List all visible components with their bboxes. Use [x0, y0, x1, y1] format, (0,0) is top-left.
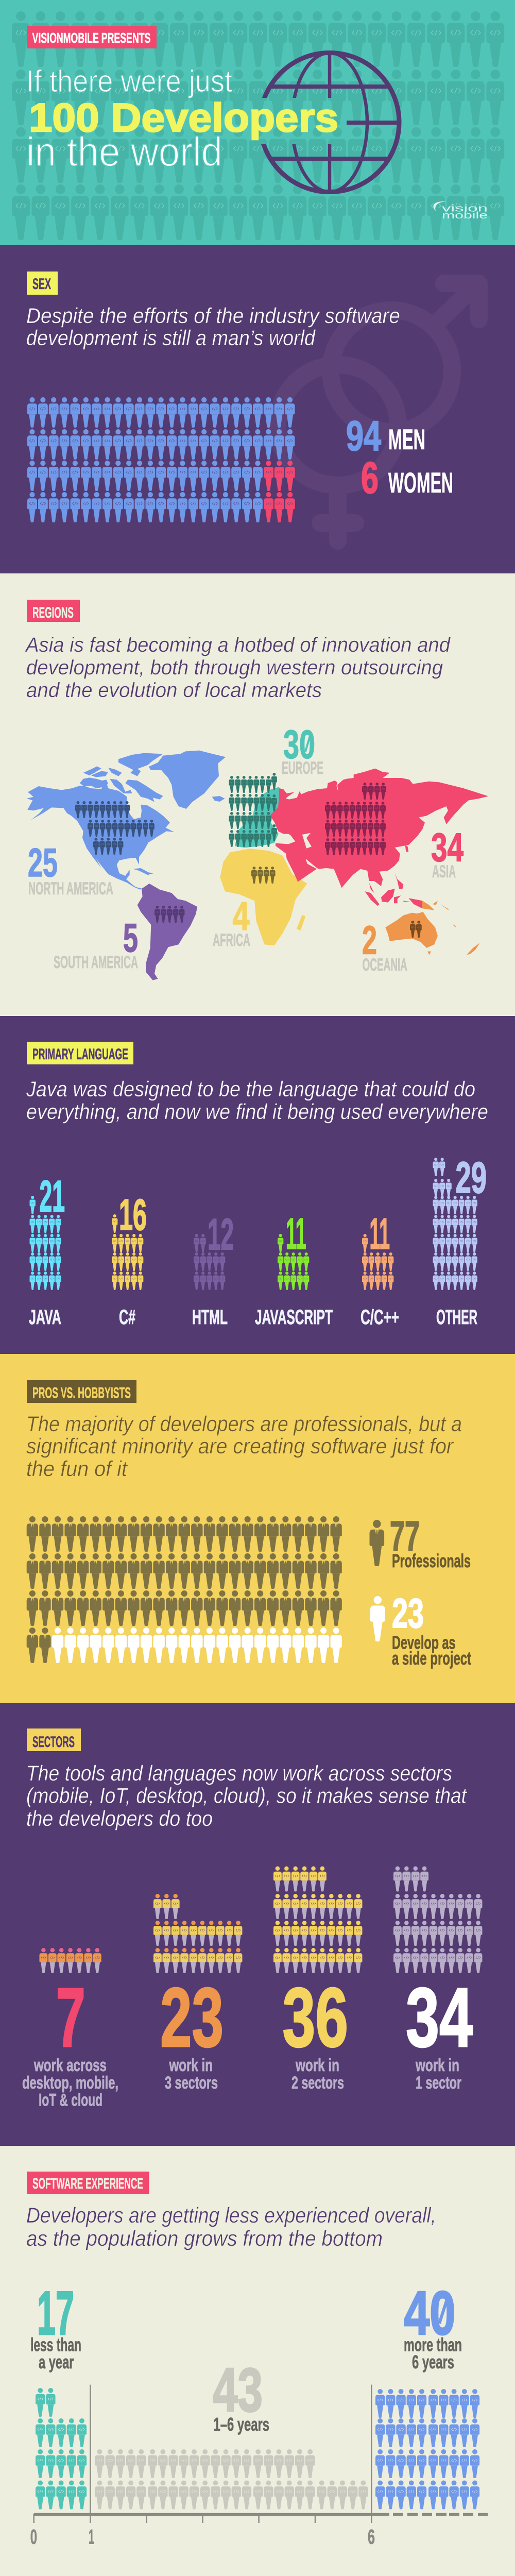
stat: europe 30: 30: [283, 721, 315, 767]
panel: sex: [0, 245, 515, 573]
icon: gender symbols watermark: [278, 283, 479, 541]
stat: 6 women: 6: [361, 453, 379, 503]
stat: north america 25: NORTH AMERICA: [28, 879, 113, 899]
column: 7 work across all sectors: IoT & cloud: [39, 2091, 102, 2110]
stat: 6 women: WOMEN: [388, 466, 453, 499]
column: 34 work in 1 sector: [393, 1866, 482, 2093]
tag: regions: [27, 600, 80, 622]
headline: [26, 1761, 468, 1831]
logo: vision mobile: vision: [442, 203, 488, 213]
people: north america: [75, 801, 154, 855]
map: asia: [270, 769, 488, 908]
stat: africa 4: AFRICA: [213, 930, 250, 950]
headline: [26, 1077, 488, 1124]
bar: javascript: JAVASCRIPT: [255, 1306, 333, 1329]
stat: 43 one to six years: 43: [213, 2355, 263, 2425]
stat: 6 women: [361, 453, 453, 503]
stat: 23 side project: Develop as: [392, 1632, 455, 1653]
stat: europe 30: EUROPE: [282, 758, 323, 778]
people: more than six years: [375, 2389, 479, 2509]
tag: sectors: [27, 1728, 81, 1751]
headline: development, both through western outsourcing: [26, 656, 443, 679]
tag: sex: [27, 272, 58, 295]
bar: other: OTHER: [436, 1306, 477, 1329]
bar: c and c++: 11: [370, 1210, 390, 1259]
people: one to six years: [95, 2449, 368, 2509]
bar: other: [433, 1154, 487, 1329]
bar: c and c++: C/C++: [360, 1306, 399, 1329]
column: 7 work across all sectors: [22, 1948, 118, 2110]
stat: 17 less than a year: less than: [30, 2334, 81, 2355]
column: 36 work in 2 sectors: 2 sectors: [291, 2073, 344, 2093]
headline: the developers do too: [26, 1806, 213, 1831]
bar: java: 21: [39, 1172, 65, 1221]
chart: experience axis: [30, 2385, 488, 2548]
headline: the fun of it: [26, 1456, 128, 1481]
stat: oceania 2: 2: [362, 917, 377, 962]
panel: sectors: [0, 1703, 515, 2146]
title: [26, 64, 338, 175]
bar: c sharp: C#: [119, 1306, 135, 1329]
column: 23 work in 3 sectors: [153, 1894, 242, 2093]
tag: sex: SEX: [32, 276, 51, 293]
title: 100 Developers: [29, 95, 338, 140]
stat: 17 less than a year: [30, 2279, 81, 2372]
tag: primary language: PRIMARY LANGUAGE: [32, 1046, 128, 1063]
map: south america: [138, 884, 197, 980]
people: africa: [251, 867, 276, 884]
headline: Despite the efforts of the industry software: [26, 303, 400, 328]
stat: south america 5: SOUTH AMERICA: [54, 953, 138, 972]
bar: c sharp: [112, 1191, 147, 1329]
title: If there were just: [26, 64, 232, 98]
chart: experience axis: 1: [89, 2526, 94, 2548]
tag: software experience: SOFTWARE EXPERIENCE: [32, 2175, 143, 2192]
chart: experience axis: 6: [368, 2526, 375, 2548]
logo: vision mobile: mobile: [442, 210, 488, 221]
column: 36 work in 2 sectors: 36: [282, 1970, 348, 2064]
column: 23 work in 3 sectors: 3 sectors: [165, 2073, 218, 2093]
icon: globe: [260, 52, 399, 193]
chart: 100 people by sex: [27, 397, 295, 522]
headline: [26, 1412, 462, 1481]
tag: visionmobile presents: [27, 26, 157, 48]
stat: 94 men: [346, 413, 425, 460]
headline: Java was designed to be the language that could do: [26, 1077, 475, 1101]
column: 36 work in 2 sectors: work in: [295, 2056, 339, 2075]
chart: experience axis: 0: [30, 2526, 37, 2548]
stat: south america 5: [54, 915, 138, 972]
column: 23 work in 3 sectors: work in: [169, 2056, 213, 2075]
people: south america: [154, 906, 184, 923]
title: in the world: [26, 129, 222, 175]
chart: 100 people professionals and hobbyists: [27, 1516, 342, 1663]
headline: development is still a man’s world: [26, 326, 316, 350]
people: europe: [229, 773, 277, 847]
column: 34 work in 1 sector: work in: [415, 2056, 459, 2075]
stat: 43 one to six years: 1–6 years: [213, 2414, 269, 2435]
tag: pros vs hobbyists: PROS VS. HOBBYISTS: [32, 1385, 131, 1401]
headline: Asia is fast becoming a hotbed of innovation and: [25, 634, 451, 656]
map: europe: [235, 787, 281, 848]
headline: and the evolution of local markets: [26, 679, 322, 702]
panel: hero: [0, 0, 515, 245]
headline: Developers are getting less experienced overall,: [26, 2203, 436, 2227]
stat: south america 5: 5: [123, 915, 138, 960]
bar: javascript: 11: [286, 1210, 306, 1259]
bar: java: [29, 1172, 65, 1329]
tag: sectors: SECTORS: [32, 1734, 75, 1751]
headline: [26, 303, 400, 350]
column: 34 work in 1 sector: 1 sector: [416, 2073, 461, 2093]
panel: regions: [0, 573, 515, 1016]
stat: 40 more than 6 years: [404, 2279, 462, 2372]
column: 7 work across all sectors: work across: [33, 2056, 107, 2075]
stat: 40 more than 6 years: 40: [404, 2279, 455, 2348]
map: north america and greenland: [27, 751, 226, 890]
bar: c sharp: 16: [119, 1191, 147, 1240]
column: 36 work in 2 sectors: [273, 1866, 362, 2093]
stat: 23 side project: 23: [392, 1590, 424, 1637]
bar: c and c++: [360, 1210, 399, 1329]
bar: java: JAVA: [29, 1306, 61, 1329]
logo: vision mobile: [433, 201, 488, 221]
stat: africa 4: 4: [233, 893, 249, 939]
bar: other: 29: [455, 1154, 487, 1202]
people: oceania: [410, 921, 422, 938]
stat: 23 side project: [370, 1590, 471, 1669]
stat: oceania 2: OCEANIA: [363, 955, 407, 975]
column: 23 work in 3 sectors: 23: [160, 1970, 224, 2064]
headline: as the population grows from the bottom: [26, 2226, 383, 2250]
people: less than a year: [36, 2388, 87, 2509]
stat: oceania 2: [362, 917, 407, 975]
panel: pros vs hobbyists: [0, 1354, 515, 1703]
tag: pros vs hobbyists: [27, 1380, 136, 1403]
map: world continents: [27, 751, 488, 980]
panel: software experience: [0, 2146, 515, 2576]
people: asia: [325, 783, 386, 855]
headline: (mobile, IoT, desktop, cloud), so it makes sense that: [26, 1784, 468, 1807]
stat: 17 less than a year: 17: [37, 2279, 74, 2348]
tag: software experience: [27, 2172, 149, 2194]
bar: html: 12: [208, 1210, 234, 1259]
stat: asia 34: ASIA: [432, 862, 456, 882]
column: 7 work across all sectors: 7: [56, 1970, 85, 2064]
tag: regions: REGIONS: [32, 604, 74, 621]
stat: asia 34: 34: [431, 824, 464, 870]
bar: html: HTML: [192, 1306, 228, 1329]
tag: primary language: [27, 1042, 133, 1064]
stat: 94 men: 94: [346, 413, 381, 460]
stat: 23 side project: a side project: [392, 1648, 471, 1669]
stat: 40 more than 6 years: 6 years: [412, 2351, 454, 2372]
stat: 94 men: MEN: [388, 423, 425, 455]
headline: significant minority are creating software just for: [26, 1434, 454, 1458]
stat: north america 25: [28, 840, 113, 899]
stat: asia 34: [431, 824, 464, 882]
panel: primary language: [0, 1016, 515, 1354]
column: 7 work across all sectors: desktop, mobile,: [22, 2073, 118, 2093]
headline: [25, 634, 451, 702]
column: 34 work in 1 sector: 34: [406, 1970, 473, 2064]
bar: html: [192, 1210, 234, 1329]
stat: 77 professionals: 77: [390, 1513, 420, 1560]
headline: The tools and languages now work across sectors: [26, 1761, 452, 1785]
map: africa: [220, 849, 307, 945]
headline: [26, 2203, 436, 2250]
stat: 40 more than 6 years: more than: [404, 2334, 462, 2355]
stat: 17 less than a year: a year: [39, 2351, 74, 2372]
stat: north america 25: 25: [28, 840, 58, 885]
map: oceania: [385, 901, 480, 955]
headline: The majority of developers are professionals, but a: [26, 1412, 462, 1436]
stat: 77 professionals: Professionals: [392, 1550, 471, 1571]
stat: 77 professionals: [370, 1513, 471, 1571]
stat: africa 4: [213, 893, 250, 950]
background people pattern: [12, 11, 504, 240]
tag: visionmobile presents: VISIONMOBILE PRESENTS: [32, 30, 150, 46]
bar: javascript: [255, 1210, 333, 1329]
